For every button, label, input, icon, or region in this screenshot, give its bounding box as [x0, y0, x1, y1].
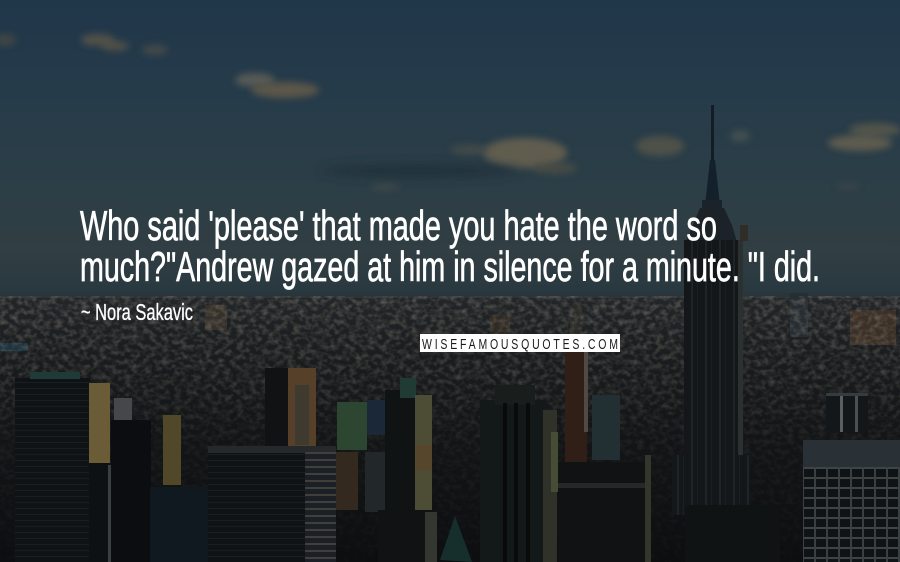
distant skyline	[0, 293, 900, 355]
watermark badge: WISEFAMOUSQUOTES.COM	[422, 335, 618, 352]
author attribution: ~ Nora Sakavic	[81, 299, 193, 325]
right foreground building	[803, 440, 900, 562]
left tower	[15, 372, 111, 562]
quote text	[80, 202, 820, 290]
city base	[0, 293, 900, 562]
mid tower	[378, 378, 472, 562]
foreground towers	[15, 352, 868, 562]
central tower	[480, 385, 558, 562]
striped block	[208, 446, 336, 562]
low block	[558, 455, 651, 562]
clouds	[0, 34, 900, 190]
empire state building	[672, 105, 780, 562]
sky	[0, 0, 900, 295]
brown tower	[265, 368, 316, 446]
right small building	[826, 393, 868, 433]
dense city texture	[0, 296, 900, 497]
